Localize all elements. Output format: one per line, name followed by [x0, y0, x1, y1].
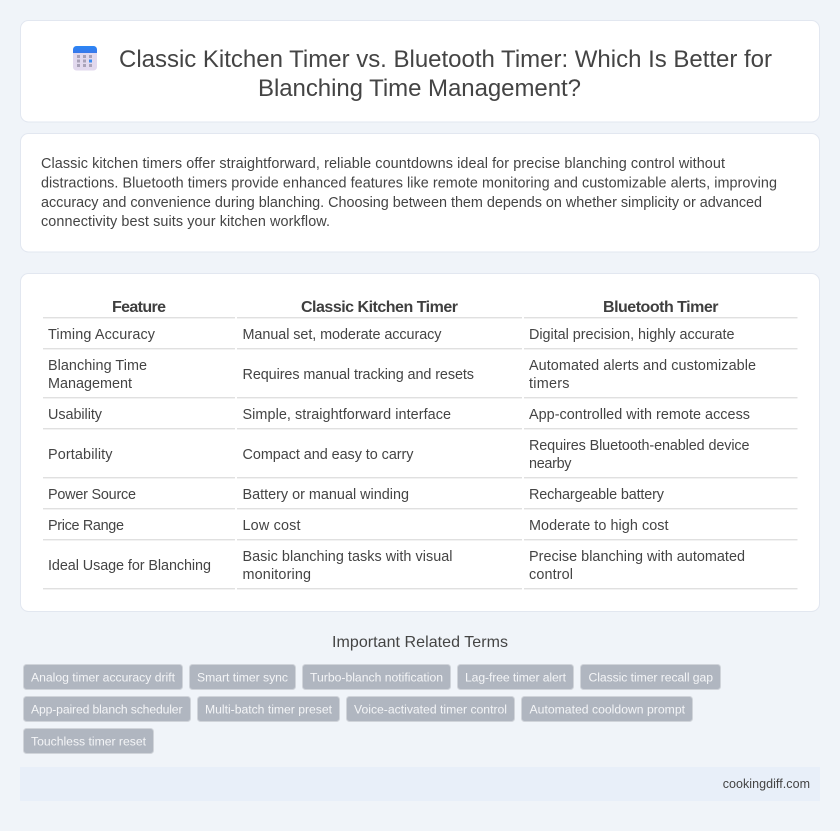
- summary text: accuracy and convenience during blanching. Choosing between them depends on whether simplicity or advanced: [41, 195, 762, 211]
- related terms chips: [24, 664, 720, 754]
- footer: cookingdiff.com: [723, 777, 810, 791]
- title: [119, 46, 772, 102]
- related terms chips: Analog timer accuracy drift: [31, 670, 176, 684]
- row: timing accuracy: Timing Accuracy: [48, 327, 156, 343]
- row: blanching time management: Automated alerts and customizable: [529, 358, 756, 374]
- row: blanching time management: Requires manual tracking and resets: [242, 367, 474, 383]
- heading: important related terms: Important Related Terms: [332, 634, 508, 651]
- summary text: distractions. Bluetooth timers provide enhanced features like remote monitoring and customizable alerts, improving: [41, 175, 777, 191]
- table header: Classic Kitchen Timer: [301, 299, 458, 316]
- row: timing accuracy: [48, 327, 734, 343]
- row: ideal usage: Ideal Usage for Blanching: [48, 558, 211, 574]
- summary text: Classic kitchen timers offer straightforward, reliable countdowns ideal for precise blanching control without: [41, 156, 725, 172]
- footer: [20, 767, 820, 801]
- related terms chips: Touchless timer reset: [31, 734, 147, 748]
- related terms chips: Voice-activated timer control: [354, 702, 507, 716]
- row: blanching time management: timers: [529, 376, 570, 392]
- row: price range: Price Range: [48, 518, 124, 534]
- row: portability: nearby: [529, 456, 572, 472]
- row: power source: Power Source: [48, 487, 136, 503]
- row: usability: [48, 407, 750, 423]
- related terms chips: Turbo-blanch notification: [310, 670, 443, 684]
- related terms chips: Lag-free timer alert: [465, 670, 567, 684]
- panel: summary card: [20, 134, 820, 252]
- title: Blanching Time Management?: [258, 75, 581, 102]
- row: blanching time management: Blanching Time: [48, 358, 147, 374]
- row: power source: [48, 487, 665, 503]
- row: timing accuracy: Digital precision, highly accurate: [529, 327, 734, 343]
- title: Classic Kitchen Timer vs. Bluetooth Timer: Which Is Better for: [119, 46, 772, 73]
- row: portability: Compact and easy to carry: [242, 447, 414, 463]
- row: power source: Rechargeable battery: [529, 487, 665, 503]
- summary text: [41, 156, 777, 230]
- table header: Bluetooth Timer: [603, 299, 718, 316]
- related terms chips: Automated cooldown prompt: [530, 702, 686, 716]
- row: ideal usage: Precise blanching with automated: [529, 549, 745, 565]
- related terms chips: App-paired blanch scheduler: [31, 702, 182, 716]
- related terms chips: Classic timer recall gap: [588, 670, 713, 684]
- related terms chips: Smart timer sync: [197, 670, 288, 684]
- related terms chips: Multi-batch timer preset: [205, 702, 333, 716]
- icon: calendar timer: [73, 46, 97, 70]
- row: ideal usage: [48, 549, 745, 583]
- row: portability: [48, 438, 750, 472]
- row: ideal usage: control: [529, 567, 573, 583]
- row: blanching time management: [48, 358, 756, 392]
- row: usability: Usability: [48, 407, 103, 423]
- row: power source: Battery or manual winding: [242, 487, 409, 503]
- row: ideal usage: Basic blanching tasks with visual: [242, 549, 452, 565]
- row: price range: Low cost: [242, 518, 300, 534]
- row: blanching time management: Management: [48, 376, 132, 392]
- table header: [112, 299, 718, 316]
- row: ideal usage: monitoring: [242, 567, 311, 583]
- row: timing accuracy: Manual set, moderate accuracy: [242, 327, 442, 343]
- table header: Feature: [112, 299, 166, 316]
- row: usability: App-controlled with remote access: [529, 407, 750, 423]
- row: portability: Requires Bluetooth-enabled device: [529, 438, 750, 454]
- summary text: connectivity best suits your kitchen workflow.: [41, 214, 330, 230]
- row: usability: Simple, straightforward interface: [242, 407, 451, 423]
- row: price range: [48, 518, 668, 534]
- row: price range: Moderate to high cost: [529, 518, 668, 534]
- row: portability: Portability: [48, 447, 113, 463]
- panel: comparison table: [20, 274, 820, 612]
- panel: title card: [20, 20, 820, 122]
